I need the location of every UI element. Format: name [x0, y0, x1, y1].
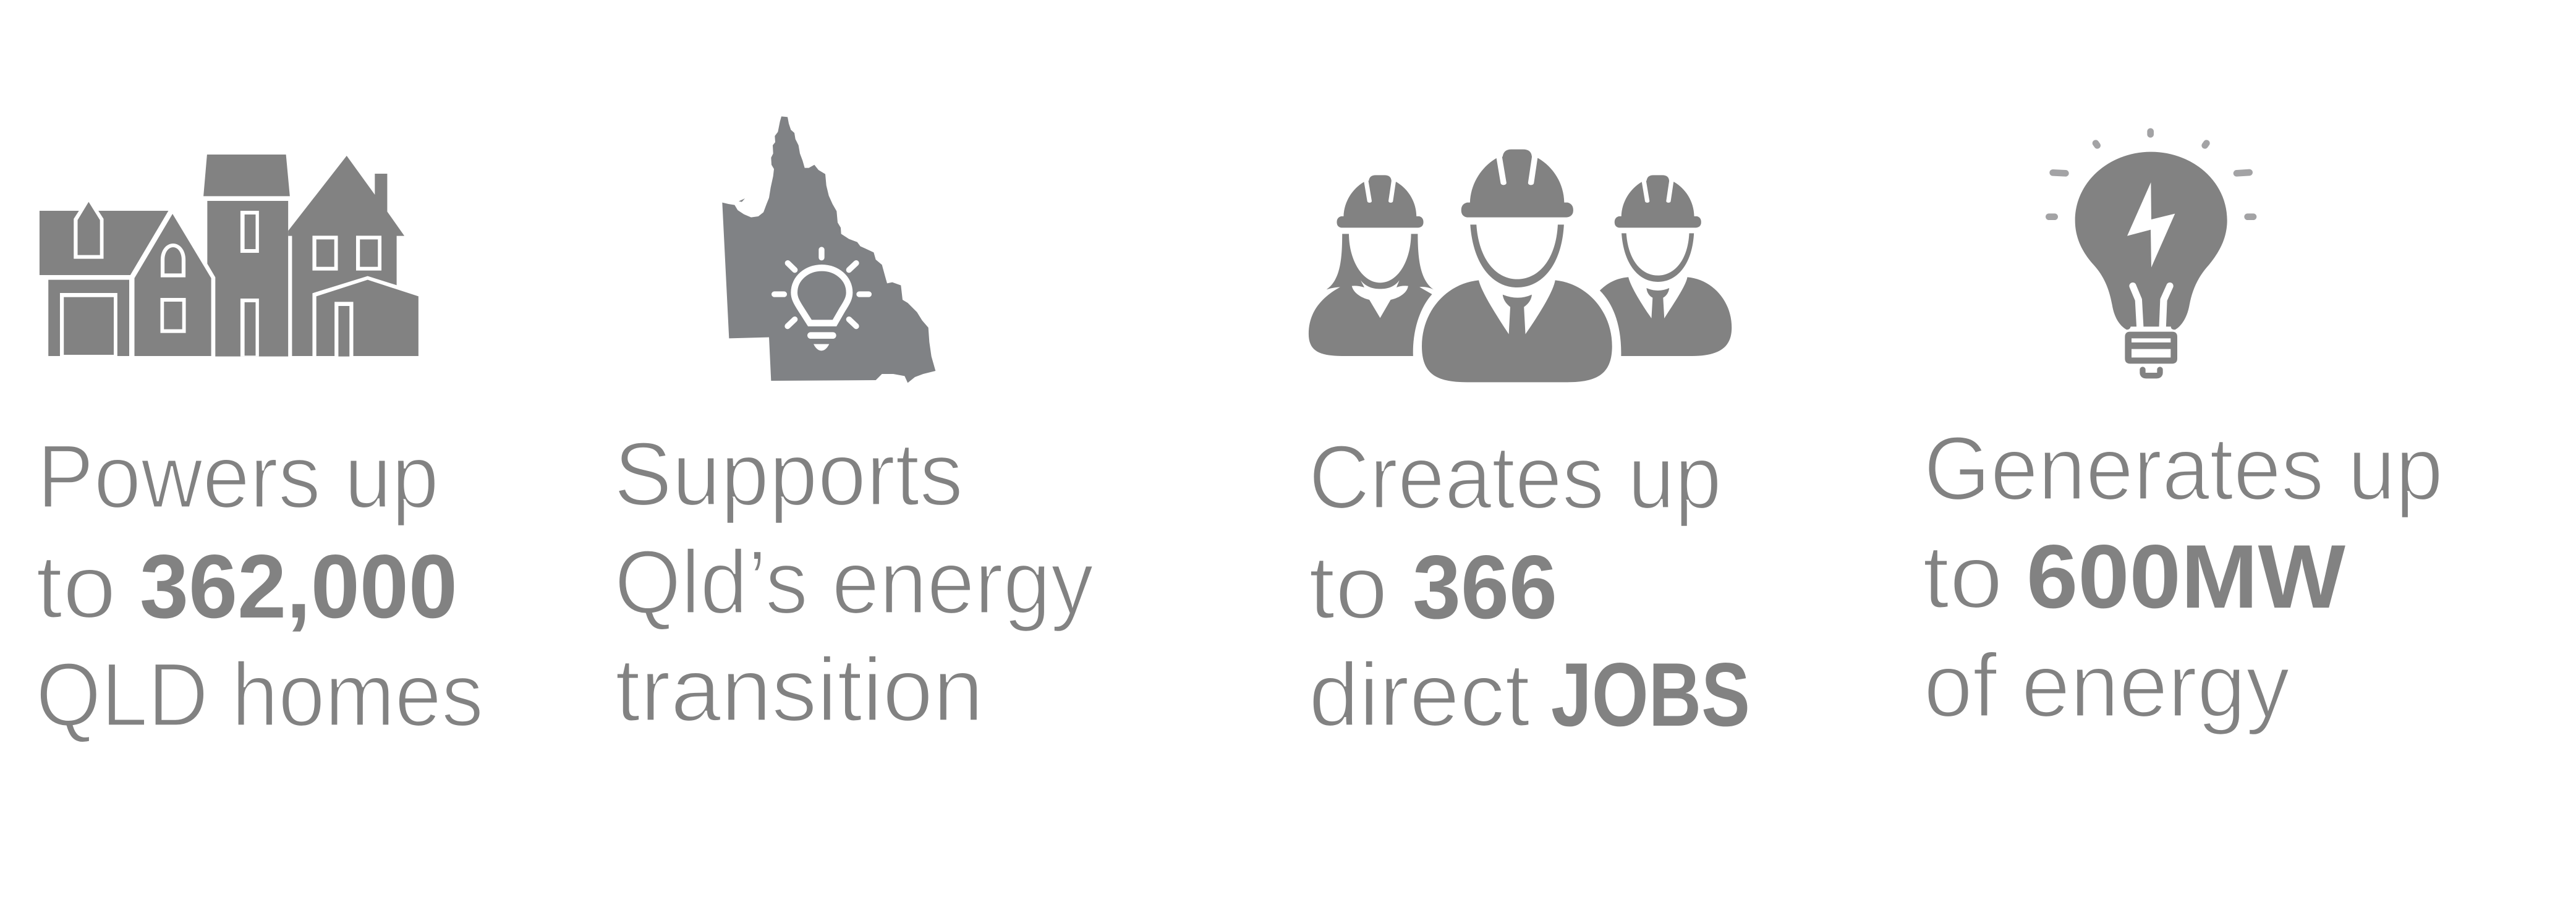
text: supports Qld's energy transition [614, 423, 1094, 740]
icon: three workers in hard hats [1308, 150, 1732, 382]
icon: light bulb with lightning bolt [2046, 128, 2256, 378]
panel: generation [1923, 128, 2443, 736]
text: creates up to 366 direct jobs: JOBS [1551, 644, 1750, 745]
text: creates up to 366 direct jobs: Creates up [1309, 427, 1722, 527]
text: generates up to 600MW of energy: Generates up [1924, 418, 2443, 519]
text: generates up to 600MW of energy [1923, 418, 2443, 736]
panel: jobs [1308, 150, 1750, 745]
text: creates up to 366 direct jobs [1309, 427, 1750, 745]
text: supports Qld's energy transition: transition [615, 639, 984, 740]
text: powers up to 362,000 QLD homes: QLD homes [36, 644, 483, 745]
text: generates up to 600MW of energy: of energy [1924, 635, 2290, 736]
panel: energy transition [614, 116, 1094, 740]
text: generates up to 600MW of energy: 600MW [2026, 526, 2345, 627]
text: creates up to 366 direct jobs: 366 [1413, 537, 1557, 637]
icon: worker left [1309, 175, 1434, 356]
text: supports Qld's energy transition: Supports [614, 423, 963, 524]
text: generates up to 600MW of energy: to [1923, 526, 2003, 627]
text: powers up to 362,000 QLD homes [36, 426, 483, 745]
icon: worker centre [1422, 150, 1612, 382]
text: supports Qld's energy transition: Qld’s energy [614, 532, 1094, 632]
text: creates up to 366 direct jobs: to [1309, 537, 1388, 637]
icon: worker right [1600, 175, 1732, 356]
text: creates up to 366 direct jobs: direct [1309, 644, 1530, 745]
text: powers up to 362,000 QLD homes: 362,000 [140, 536, 457, 637]
text: powers up to 362,000 QLD homes: Powers up [37, 426, 439, 527]
text: powers up to 362,000 QLD homes: to [36, 536, 116, 637]
icon: Queensland map with light bulb [722, 116, 936, 383]
panel: homes [36, 155, 483, 745]
icon: row of houses [40, 155, 419, 357]
